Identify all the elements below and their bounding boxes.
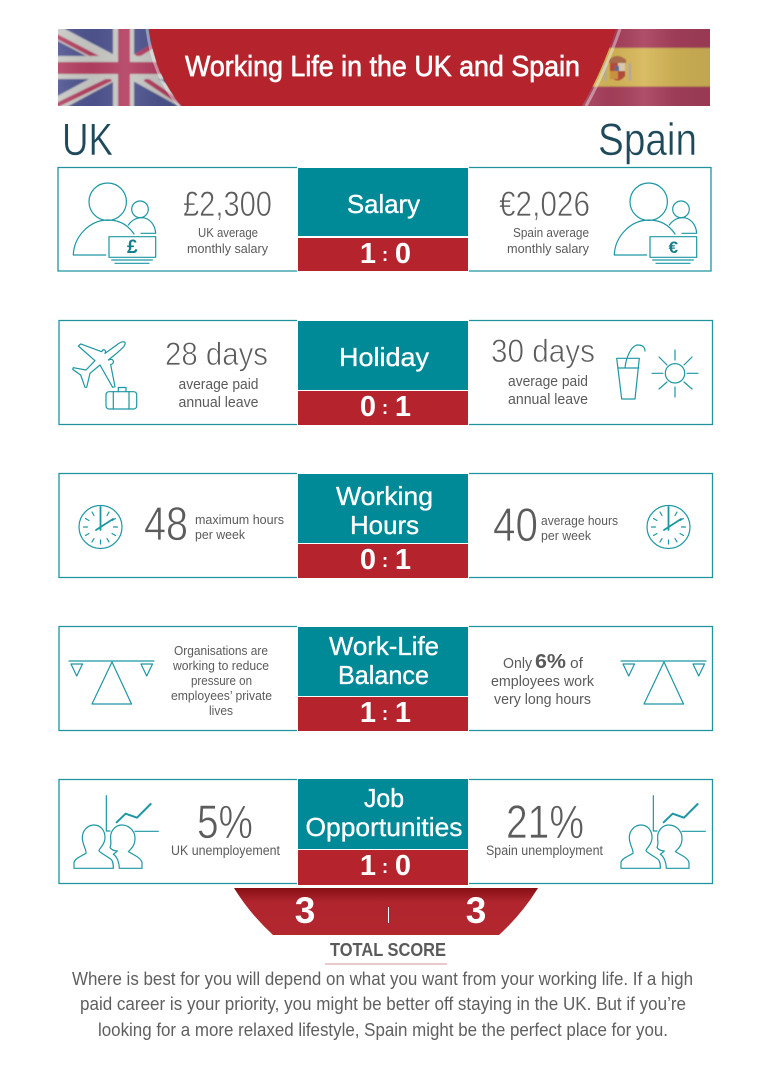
category label: working hours (336, 481, 433, 540)
conclusion text: Where is best for you will depend on what you want from your working life. If a high (72, 969, 693, 989)
panel: holiday (59, 320, 712, 425)
UK flag (58, 29, 182, 106)
Spain holiday figure: 30 days (491, 333, 595, 369)
UK jobs box (59, 780, 297, 884)
header banner (52, 26, 712, 110)
Spain holiday caption: annual leave (508, 391, 588, 408)
score: work-life balance: : (382, 704, 388, 725)
category: holiday (298, 321, 468, 390)
category label: working hours: Hours (350, 510, 419, 540)
Spain total: 3 (466, 890, 486, 931)
score: working hours: 0 (360, 544, 376, 576)
Spain unemployment caption: Spain unemployment (486, 843, 603, 858)
Spain hours caption: average hours (541, 513, 618, 528)
score: salary: 1 (360, 238, 376, 270)
Spain salary caption (507, 225, 589, 256)
Spain salary figure: €2,026 (499, 185, 590, 224)
Spain salary caption: monthly salary (507, 241, 589, 256)
ribbon sheen (147, 29, 620, 106)
UK holiday caption (178, 376, 258, 411)
score: work-life balance: 1 (360, 697, 376, 729)
Spain jobs box (469, 780, 712, 884)
icon: sun (652, 350, 698, 397)
UK unemployment caption: UK unemployement (171, 843, 280, 858)
score: job opportunities (298, 850, 468, 885)
conclusion text (72, 969, 693, 1040)
UK holiday caption: annual leave (178, 394, 258, 411)
score: job opportunities: 0 (395, 850, 411, 882)
red title ribbon (149, 29, 616, 106)
panel: salary (58, 168, 711, 271)
score: work-life balance (298, 697, 468, 731)
Spain holiday caption (508, 373, 588, 408)
UK balance text: lives (209, 703, 233, 718)
icon: people and chart Spain (621, 796, 705, 868)
Spain balance text: very long hours (494, 691, 591, 708)
category label: job opportunities: Job (364, 783, 404, 813)
Spain salary box (469, 168, 711, 271)
UK hours caption: per week (195, 527, 245, 542)
UK hours caption (195, 512, 284, 542)
UK balance text: employees’ private (171, 688, 272, 703)
divider (388, 907, 389, 923)
icon: scales Spain (621, 661, 706, 704)
total score label: TOTAL SCORE (330, 940, 446, 960)
Spain balance text: Only (503, 655, 532, 672)
icon: clock Spain (647, 506, 690, 548)
coat of arms (605, 56, 630, 81)
panel: work-life balance (59, 626, 712, 731)
score: salary: 0 (395, 238, 411, 270)
UK hours figure: 48 (144, 497, 188, 550)
UK balance text (171, 643, 272, 718)
heading: UK: UK (62, 114, 113, 165)
icon: people and chart UK (74, 796, 158, 868)
score: job opportunities: : (382, 857, 388, 878)
Spain holiday box (469, 320, 712, 424)
score: salary: : (382, 245, 388, 266)
icon: drink (617, 345, 645, 399)
UK unemployment figure: 5% (197, 795, 253, 848)
Spain balance box (469, 626, 712, 730)
UK hours box (59, 474, 297, 578)
UK salary box (58, 168, 297, 271)
panel: working hours (59, 474, 712, 578)
heading: Spain: Spain (598, 114, 697, 165)
category label: salary: Salary (347, 189, 420, 219)
score: holiday: 0 (360, 391, 376, 423)
conclusion text: paid career is your priority, you might be better off staying in the UK. But if you’re (80, 994, 686, 1014)
category: working hours (298, 474, 468, 543)
category: work-life balance (298, 627, 468, 696)
icon: person with euro monitor: € (669, 238, 679, 257)
icon: clock UK (79, 506, 122, 548)
score: working hours: 1 (395, 544, 411, 576)
icon: person with pound monitor: £ (127, 237, 138, 258)
total score ribbon (234, 888, 538, 935)
Spain unemployment figure: 21% (506, 795, 584, 848)
score: salary (298, 238, 468, 271)
title: Working Life in the UK and Spain (185, 51, 580, 83)
UK total: 3 (295, 890, 315, 931)
category: job opportunities (298, 779, 468, 849)
conclusion text: looking for a more relaxed lifestyle, Spain might be the perfect place for you. (98, 1020, 668, 1040)
UK holiday box (59, 320, 297, 424)
panel: job opportunities (59, 779, 712, 885)
Spain hours caption: per week (541, 528, 591, 543)
category label: job opportunities: Opportunities (306, 812, 462, 842)
category label: job opportunities (306, 783, 462, 842)
score: holiday (298, 391, 468, 425)
score: holiday: 1 (395, 391, 411, 423)
category label: work-life balance: Work-Life (329, 631, 439, 661)
UK balance text: working to reduce (172, 658, 269, 673)
Spain balance text: employees work (491, 673, 594, 690)
UK salary caption: UK average (198, 225, 258, 240)
score: holiday: : (382, 398, 388, 419)
score: job opportunities: 1 (360, 850, 376, 882)
Spain hours caption (541, 513, 618, 543)
category label: work-life balance (329, 631, 439, 690)
Spain flag (582, 29, 710, 106)
Spain salary caption: Spain average (513, 225, 589, 240)
UK salary caption (187, 225, 268, 256)
category: salary (298, 168, 468, 236)
icon: plane (73, 342, 125, 387)
category label: holiday: Holiday (339, 342, 429, 372)
Spain hours box (469, 474, 712, 578)
icon: scales UK (69, 661, 154, 704)
score: working hours (298, 544, 468, 578)
Spain balance text: of (570, 655, 584, 672)
UK salary caption: monthly salary (187, 241, 268, 256)
UK balance text: Organisations are (174, 643, 268, 658)
category label: working hours: Working (336, 481, 433, 511)
Spain holiday caption: average paid (508, 373, 588, 390)
score: working hours: : (382, 551, 388, 572)
UK balance text: pressure on (191, 673, 252, 688)
icon: suitcase (106, 388, 137, 409)
icon: person with euro monitor (614, 183, 697, 263)
score: work-life balance: 1 (395, 697, 411, 729)
UK salary figure: £2,300 (183, 185, 272, 224)
UK hours caption: maximum hours (195, 512, 284, 527)
UK holiday caption: average paid (178, 376, 258, 393)
Spain hours figure: 40 (493, 498, 538, 551)
category label: work-life balance: Balance (338, 660, 429, 690)
UK holiday figure: 28 days (165, 336, 268, 372)
icon: person with pound monitor (73, 183, 156, 263)
UK balance box (59, 626, 297, 730)
Spain balance text (491, 651, 594, 708)
Spain balance text: 6% (535, 651, 566, 673)
